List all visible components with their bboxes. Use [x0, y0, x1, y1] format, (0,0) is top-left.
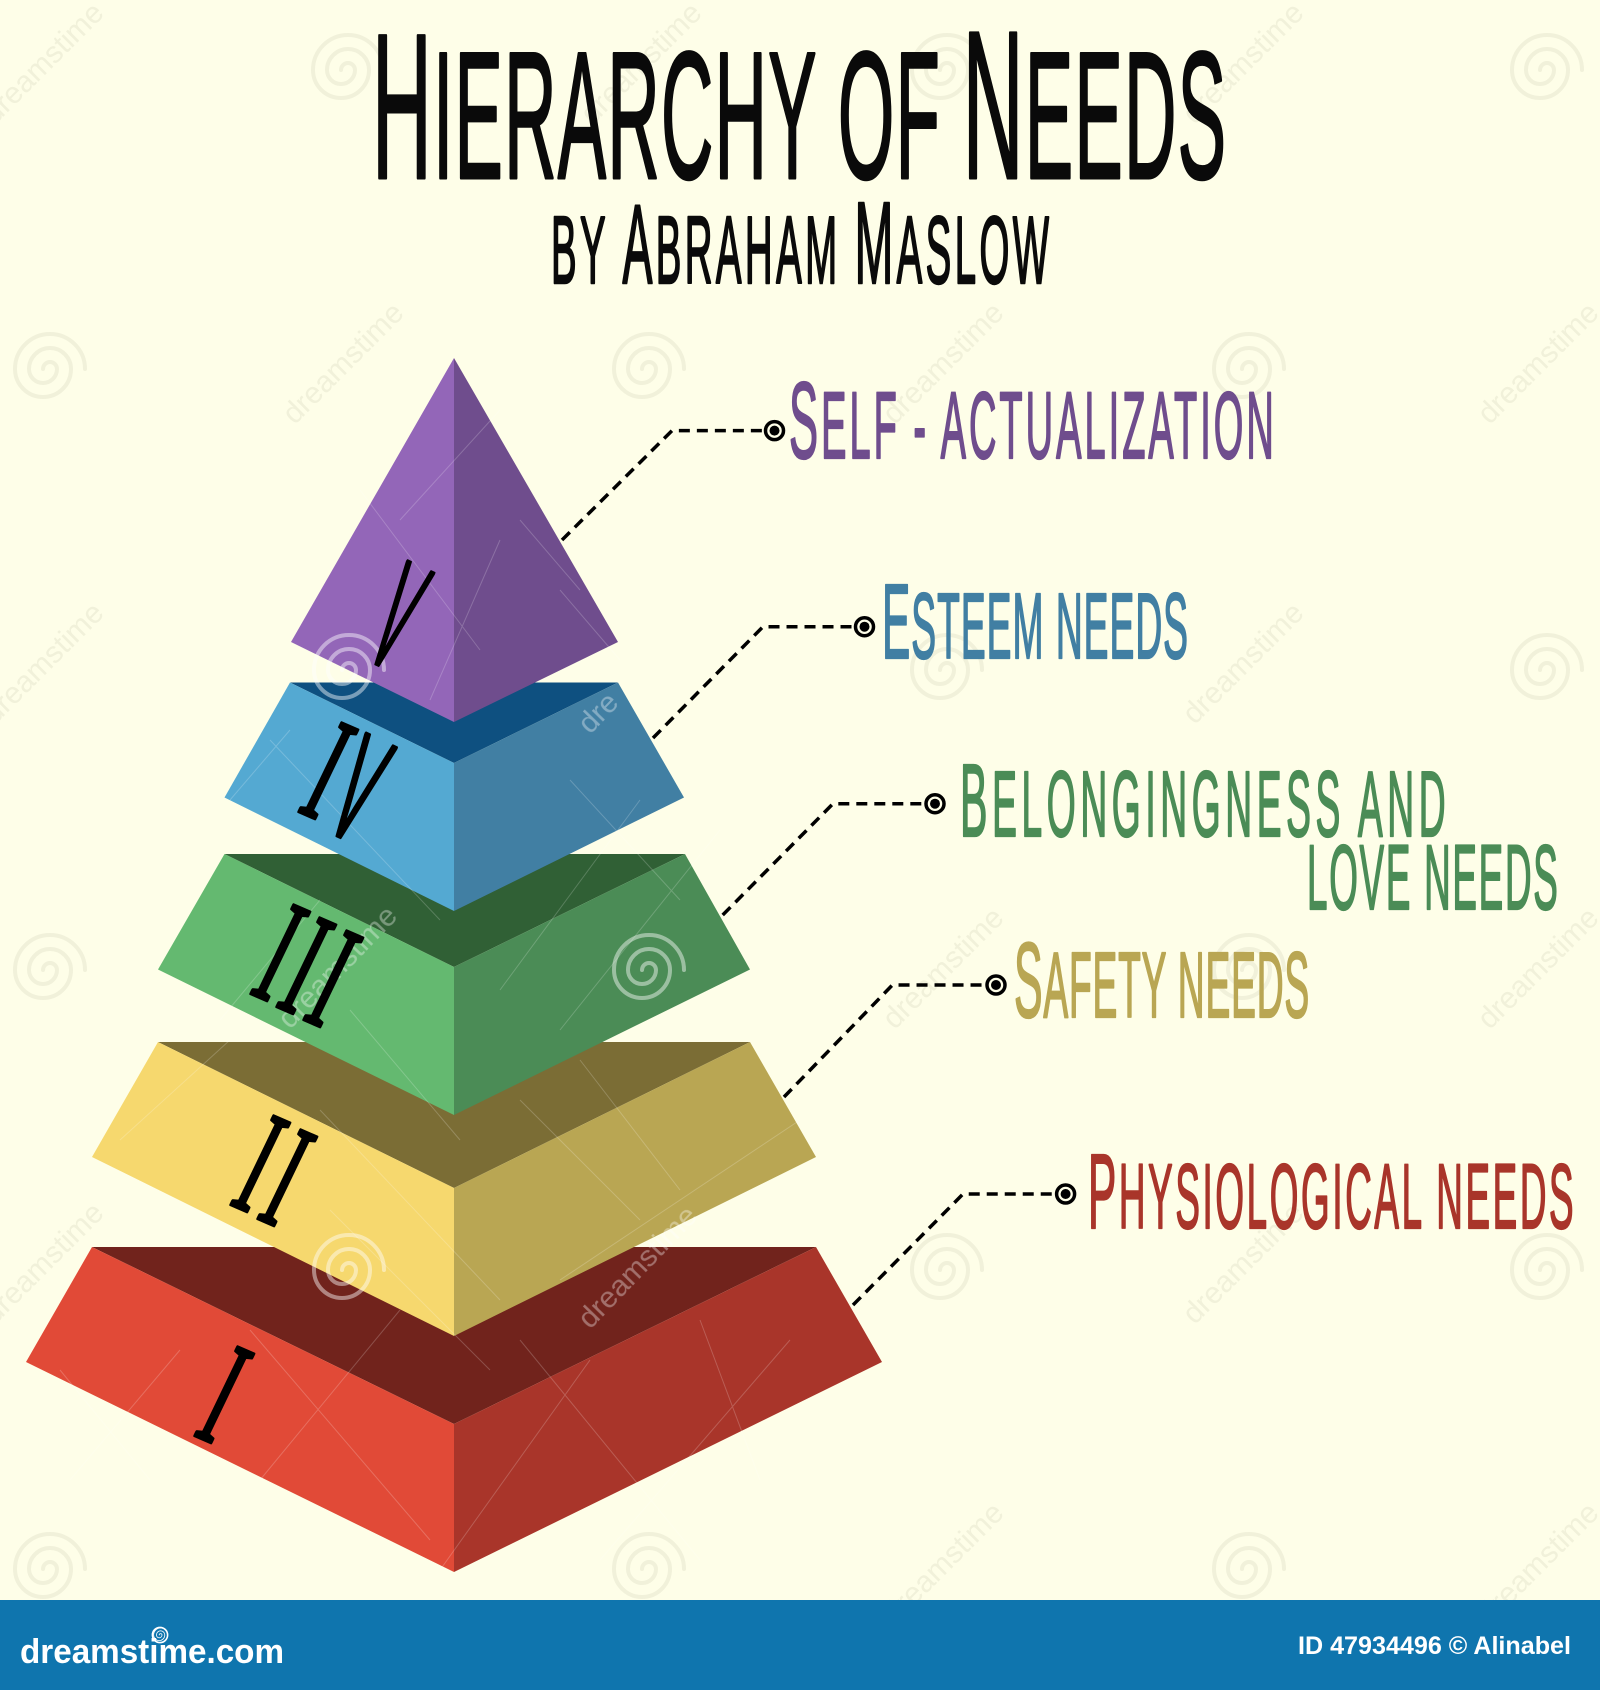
numeral II: I — [214, 1084, 307, 1243]
infographic canvas: dreamstime — [1176, 1196, 1310, 1330]
layer III: belonging (green) — [158, 854, 750, 1115]
infographic canvas: dreamstime — [571, 1199, 704, 1335]
infographic canvas: dreamstime — [574, 0, 708, 130]
layer V: self-actualization (purple) — [291, 358, 618, 722]
leader: physiological — [853, 1185, 1075, 1305]
numeral III: I — [287, 899, 380, 1058]
layer II: safety (yellow) — [92, 1042, 816, 1336]
leader: self-actualization — [562, 422, 784, 540]
label: belongingness and love needs — [960, 743, 1558, 929]
label: esteem: ESTEEM NEEDS — [882, 563, 1188, 682]
numeral IV: I — [282, 691, 375, 850]
leader: belonging — [723, 795, 944, 915]
numeral III: I — [260, 886, 353, 1045]
numeral III — [234, 873, 380, 1058]
footer brand: dreamstime.com — [20, 1633, 284, 1671]
label: self-actualization: SELF - ACTUALIZATION — [789, 360, 1274, 482]
numeral II: I — [241, 1098, 334, 1257]
layer IV: esteem (blue) — [224, 682, 684, 911]
infographic canvas: dreamstime — [271, 899, 404, 1035]
footer banner — [0, 1600, 1600, 1690]
label: belongingness and love needs: BELONGINGNESS AND — [960, 743, 1446, 858]
numeral V: V — [350, 530, 449, 700]
infographic canvas: dreamstime — [876, 296, 1010, 430]
numeral III: I — [234, 873, 327, 1032]
infographic canvas: dreamstime — [876, 1496, 1010, 1630]
numeral I: I — [178, 1315, 271, 1474]
infographic canvas: dreamstime — [276, 296, 410, 430]
subtitle: BY ABRAHAM MASLOW — [551, 178, 1049, 308]
leader: safety — [784, 976, 1005, 1097]
label: physiological: PHYSIOLOGICAL NEEDS — [1088, 1133, 1574, 1252]
infographic canvas: dreamstime — [876, 901, 1010, 1035]
pyramid — [26, 358, 882, 1572]
layer I: physiological (red) — [26, 1247, 882, 1572]
numeral IV: V — [310, 704, 410, 873]
icon: dreamstime spiral — [152, 1627, 168, 1643]
leader: esteem — [653, 618, 874, 738]
footer image id: ID 47934496 © Alinabel — [1298, 1632, 1571, 1660]
label: safety: SAFETY NEEDS — [1014, 921, 1309, 1041]
infographic canvas: dre — [571, 686, 625, 740]
infographic canvas: dreamstime — [1176, 596, 1310, 730]
infographic canvas: dreamstime — [1176, 0, 1310, 130]
label: belongingness and love needs: LOVE NEEDS — [1307, 826, 1558, 929]
